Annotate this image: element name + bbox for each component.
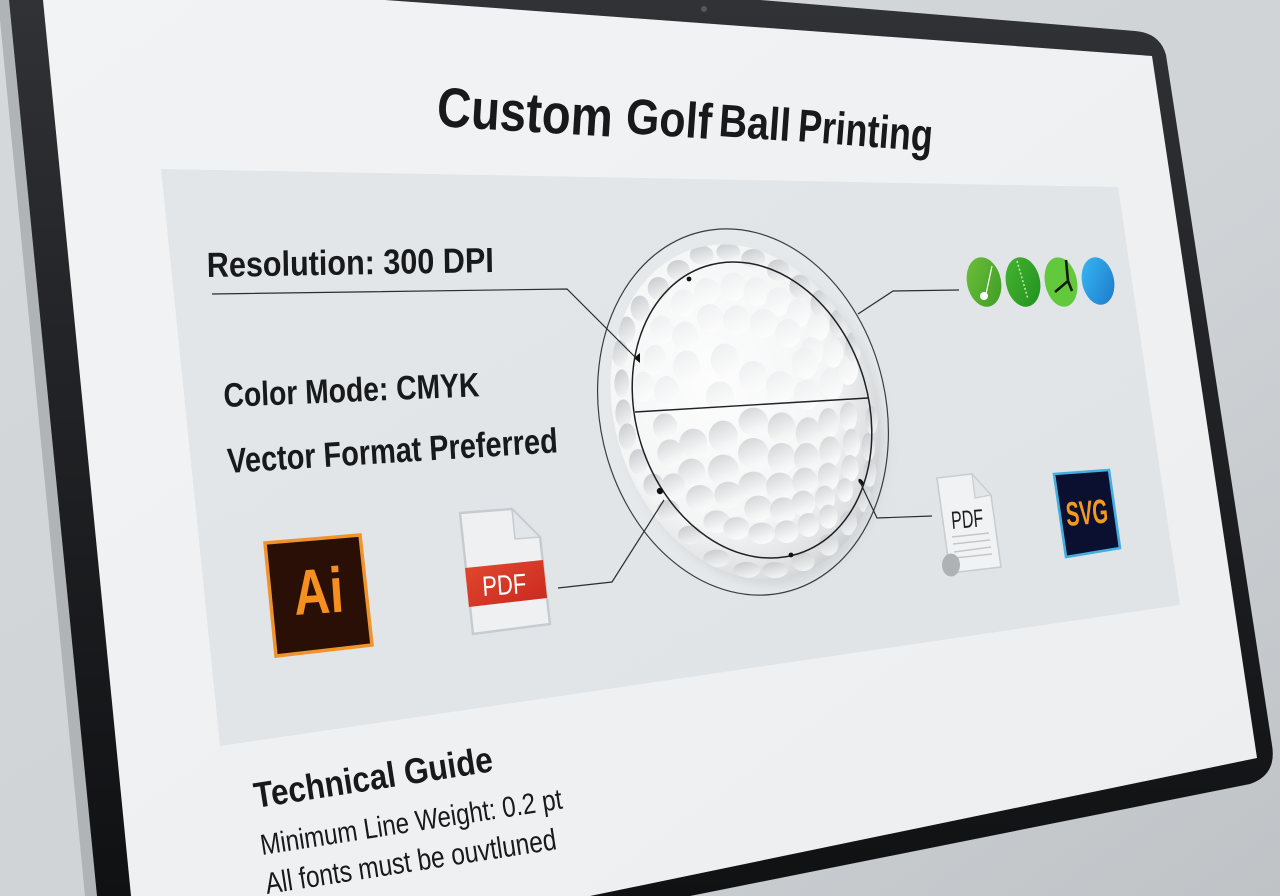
title: Golf [624,88,714,150]
panel: specifications [161,169,1180,746]
ball shadow [578,221,926,619]
ball body [569,209,921,615]
title [435,75,935,162]
golf ball diagram [596,228,890,596]
dimples [613,244,876,577]
text: resolution: Resolution: 300 DPI [206,241,494,285]
heading: technical guide: Technical Guide [251,739,495,816]
icon: green ball with seam [1001,254,1045,310]
text: vector format: Vector Format Preferred [226,421,559,481]
translucent halo [562,200,924,624]
leader: resolution [212,289,636,358]
icon: PDF document with red banner: PDF [481,568,527,602]
icon: PDF document with text lines [937,474,1001,576]
leader: PDF right [860,482,932,518]
icon: PDF document with red banner [460,509,550,634]
icon: blue ball [1077,254,1119,308]
icon: PDF document with text lines: PDF [950,504,984,535]
text: color mode: Color Mode: CMYK [223,366,480,415]
leader: PDF left [558,500,664,588]
icons: colored golf balls [962,254,1119,310]
title: Printing [796,99,935,162]
outer ring [562,200,924,624]
technical guide block [251,739,564,896]
icon: green ball with tee [962,254,1006,310]
icon: Adobe Illustrator: Ai [291,554,346,629]
icon: SVG file: SVG [1064,492,1110,534]
inner ring [595,231,909,589]
title: Ball [717,94,793,151]
ring markers [634,277,865,557]
silver side edge [0,0,100,896]
icon: SVG file [1054,470,1120,557]
icon: Adobe Illustrator [265,535,372,656]
leader: colour icons [858,290,959,314]
camera [701,6,707,12]
line: minimum line weight: Minimum Line Weight: 0.2 pt [258,784,564,862]
icon: green ball with black mark [1040,254,1082,310]
title: Custom [435,75,615,149]
leader lines [212,289,959,588]
equator line [635,398,868,412]
